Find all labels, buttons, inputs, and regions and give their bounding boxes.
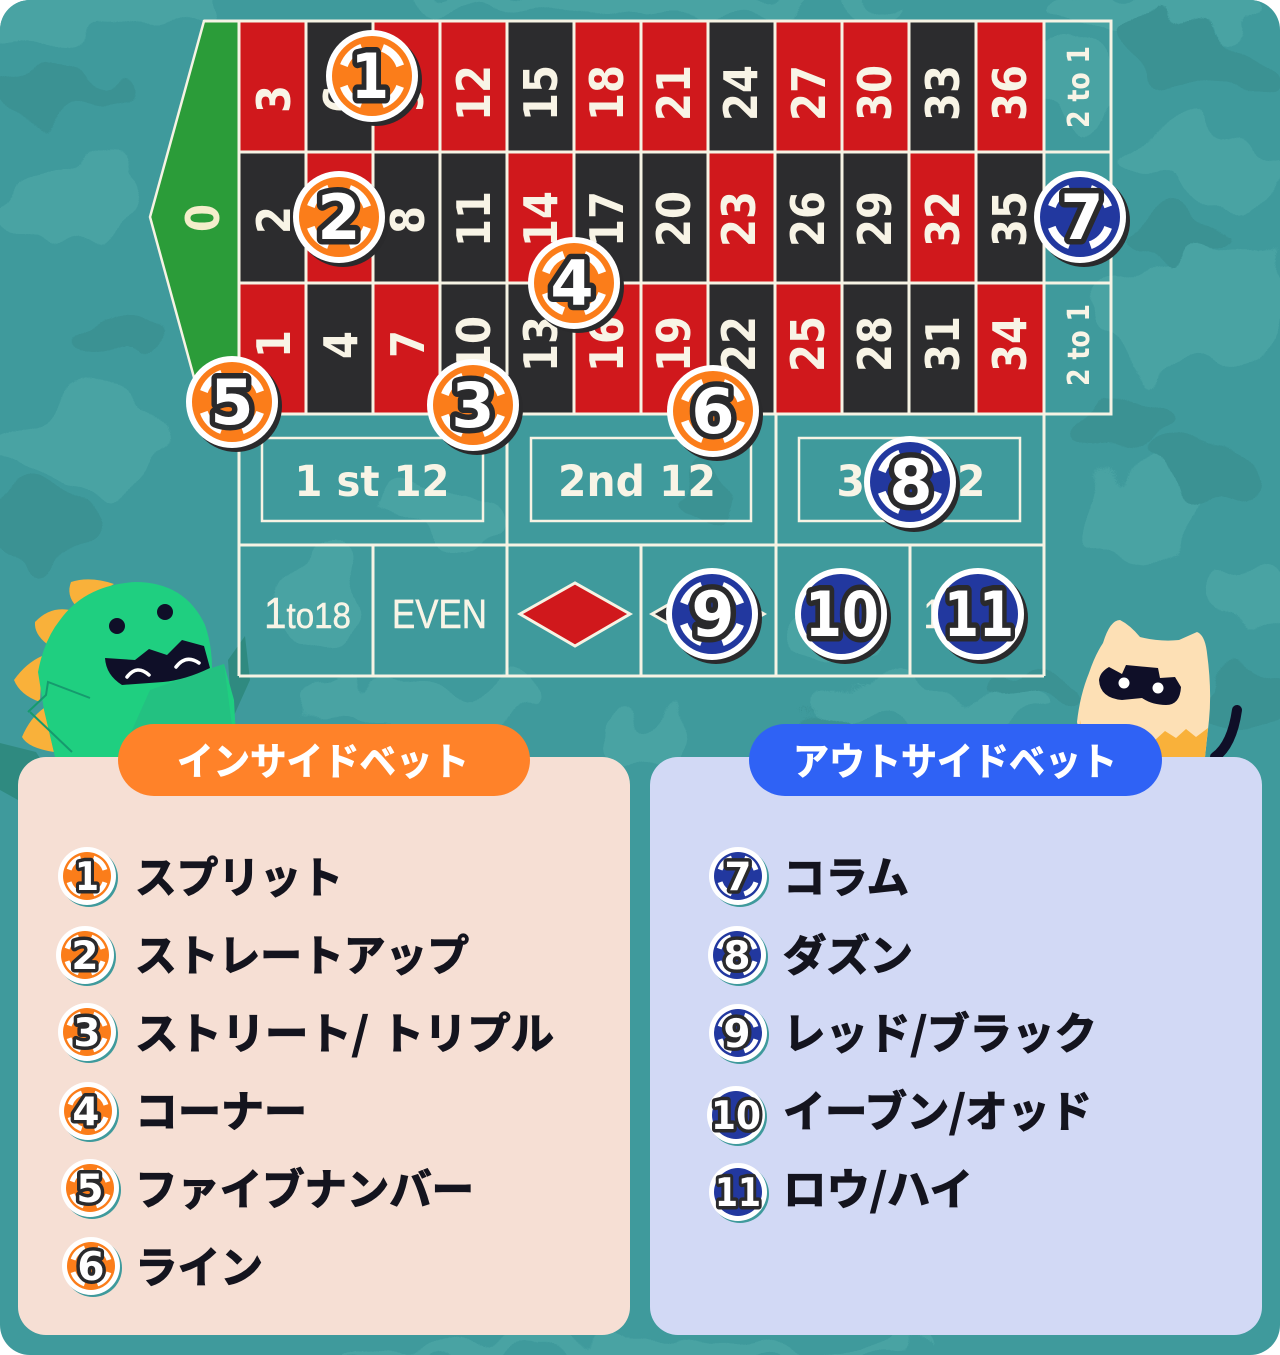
outside bets: ODD xyxy=(808,591,876,637)
list item 4 xyxy=(59,1082,307,1142)
heading pill: outside bets: アウトサイドベット xyxy=(793,742,1117,784)
red diamond xyxy=(520,583,630,646)
list item 11: 11 xyxy=(715,1171,761,1216)
2 to 1 column labels xyxy=(1062,46,1097,386)
list item 1: スプリット xyxy=(135,855,343,903)
middle row: 26 xyxy=(781,191,835,247)
list item 6: ライン xyxy=(135,1245,263,1293)
list item 9: レッド/ブラック xyxy=(783,1000,1097,1062)
outside bets xyxy=(239,545,1044,676)
panel: outside bets xyxy=(650,724,1262,1335)
chip 10 xyxy=(795,568,891,664)
top row: 12 xyxy=(447,65,501,121)
middle row: 5 xyxy=(314,206,368,234)
list item 1: 1 xyxy=(75,855,99,900)
top row: 36 xyxy=(983,65,1037,121)
roulette table xyxy=(150,21,1111,676)
list item 8: ダズン xyxy=(783,933,913,981)
heading pill: outside bets xyxy=(749,724,1162,796)
top row: 15 xyxy=(514,65,568,121)
zero pocket: 0 xyxy=(176,204,230,232)
chip 7 xyxy=(1034,171,1130,267)
list item 2: ストレートアップ xyxy=(135,933,469,981)
bottom row: 28 xyxy=(848,316,902,372)
heading pill: inside bets: インサイドベット xyxy=(177,742,469,784)
dinosaur eyes xyxy=(109,604,173,634)
middle row: 29 xyxy=(848,191,902,247)
list item 8 xyxy=(708,926,913,986)
chip 6 xyxy=(667,365,763,461)
chip 5 xyxy=(186,356,282,452)
character: green dinosaur xyxy=(14,579,237,757)
dozen bets: 1 st 12 xyxy=(294,457,450,507)
dozen bets: 2nd 12 xyxy=(558,457,716,507)
outside bets: 1to18 xyxy=(264,589,351,638)
number grid xyxy=(204,21,1111,414)
middle row: 14 xyxy=(514,191,568,247)
cat eyes xyxy=(1118,678,1164,694)
bottom row: 4 xyxy=(314,331,368,359)
chip 8: 8 xyxy=(889,446,933,519)
list item 7 xyxy=(709,847,909,907)
list item 6: 6 xyxy=(77,1245,105,1290)
middle row xyxy=(239,152,1044,283)
panel: inside bets xyxy=(18,724,630,1335)
list item 2: 2 xyxy=(71,934,99,979)
list item 7: 7 xyxy=(724,855,752,900)
middle row: 23 xyxy=(712,191,766,247)
bottom row: 25 xyxy=(781,316,835,372)
chip 4: 4 xyxy=(550,247,594,320)
chip 1 xyxy=(326,30,422,126)
bottom row: 13 xyxy=(514,316,568,372)
chip 2 xyxy=(293,171,389,267)
top row: 3 xyxy=(247,85,301,113)
list item 11: ロウ/ハイ xyxy=(783,1156,973,1218)
list item 5: 5 xyxy=(76,1167,104,1212)
top row: 24 xyxy=(714,65,768,121)
bottom row: 10 xyxy=(447,316,501,372)
list item 1 xyxy=(58,847,343,907)
list item 10: イーブン/オッド xyxy=(783,1078,1092,1140)
bottom row: 31 xyxy=(916,316,970,372)
character: cream cat xyxy=(1077,620,1237,757)
list item 4: コーナー xyxy=(135,1089,307,1137)
top row: 9 xyxy=(380,85,434,113)
top row: 27 xyxy=(782,65,836,121)
chip 3 xyxy=(427,359,523,455)
chip 11 xyxy=(932,568,1028,664)
middle row: 11 xyxy=(447,191,501,247)
chip 2: 2 xyxy=(317,181,361,254)
bottom row xyxy=(239,283,1044,414)
cat mask xyxy=(1099,665,1181,705)
chip 10: 10 xyxy=(805,578,879,651)
list item 11 xyxy=(709,1156,973,1223)
2 to 1 column labels: 2 to 1 xyxy=(1062,176,1097,258)
list item 10: 10 xyxy=(711,1094,761,1139)
top row: 33 xyxy=(916,65,970,121)
middle row: 8 xyxy=(381,206,435,234)
middle row: 20 xyxy=(647,191,701,247)
chip 9 xyxy=(666,568,762,664)
top row: 30 xyxy=(848,65,902,121)
middle row: 32 xyxy=(916,191,970,247)
top row: 21 xyxy=(647,65,701,121)
bottom row: 34 xyxy=(983,316,1037,372)
bottom row: 16 xyxy=(580,316,634,372)
top row xyxy=(239,21,1044,152)
outside bets: 19to36 xyxy=(924,591,1014,637)
bottom row: 19 xyxy=(647,316,701,372)
dozen bets xyxy=(239,414,1044,676)
dozen bets: 3rd 12 xyxy=(836,457,986,507)
black diamond xyxy=(652,582,764,646)
middle row: 17 xyxy=(580,191,634,247)
middle row: 35 xyxy=(983,191,1037,247)
2 to 1 column labels: 2 to 1 xyxy=(1062,46,1097,128)
heading pill: inside bets xyxy=(118,724,530,796)
list item 6 xyxy=(62,1237,263,1297)
chip 9: 9 xyxy=(691,578,735,651)
list item 4: 4 xyxy=(72,1090,100,1135)
bottom row: 1 xyxy=(247,330,301,358)
list item 2 xyxy=(56,926,469,986)
top row: 18 xyxy=(580,65,634,121)
chip 1: 1 xyxy=(351,40,389,113)
list item 3: ストリート/ トリプル xyxy=(135,1000,554,1062)
bottom row: 7 xyxy=(381,330,435,358)
chip 4 xyxy=(528,237,624,333)
chip 7: 7 xyxy=(1060,181,1104,254)
chip 6: 6 xyxy=(691,375,735,448)
chip 11: 11 xyxy=(944,578,1014,651)
list item 3: 3 xyxy=(73,1011,101,1056)
outside bets: EVEN xyxy=(392,591,487,637)
bottom row: 22 xyxy=(712,316,766,372)
top row: 6 xyxy=(314,85,368,113)
2 to 1 column labels: 2 to 1 xyxy=(1062,304,1097,386)
zero pocket xyxy=(150,21,239,414)
list item 5 xyxy=(61,1159,474,1219)
dinosaur mouth xyxy=(105,640,210,685)
dinosaur smile marks xyxy=(127,659,199,677)
chip 3: 3 xyxy=(451,369,495,442)
chip 5: 5 xyxy=(210,366,254,439)
list item 9: 9 xyxy=(723,1012,751,1057)
middle row: 2 xyxy=(247,206,301,234)
list item 8: 8 xyxy=(723,934,751,979)
list item 5: ファイブナンバー xyxy=(135,1167,474,1215)
list item 7: コラム xyxy=(783,855,909,903)
chip 8 xyxy=(864,436,960,532)
